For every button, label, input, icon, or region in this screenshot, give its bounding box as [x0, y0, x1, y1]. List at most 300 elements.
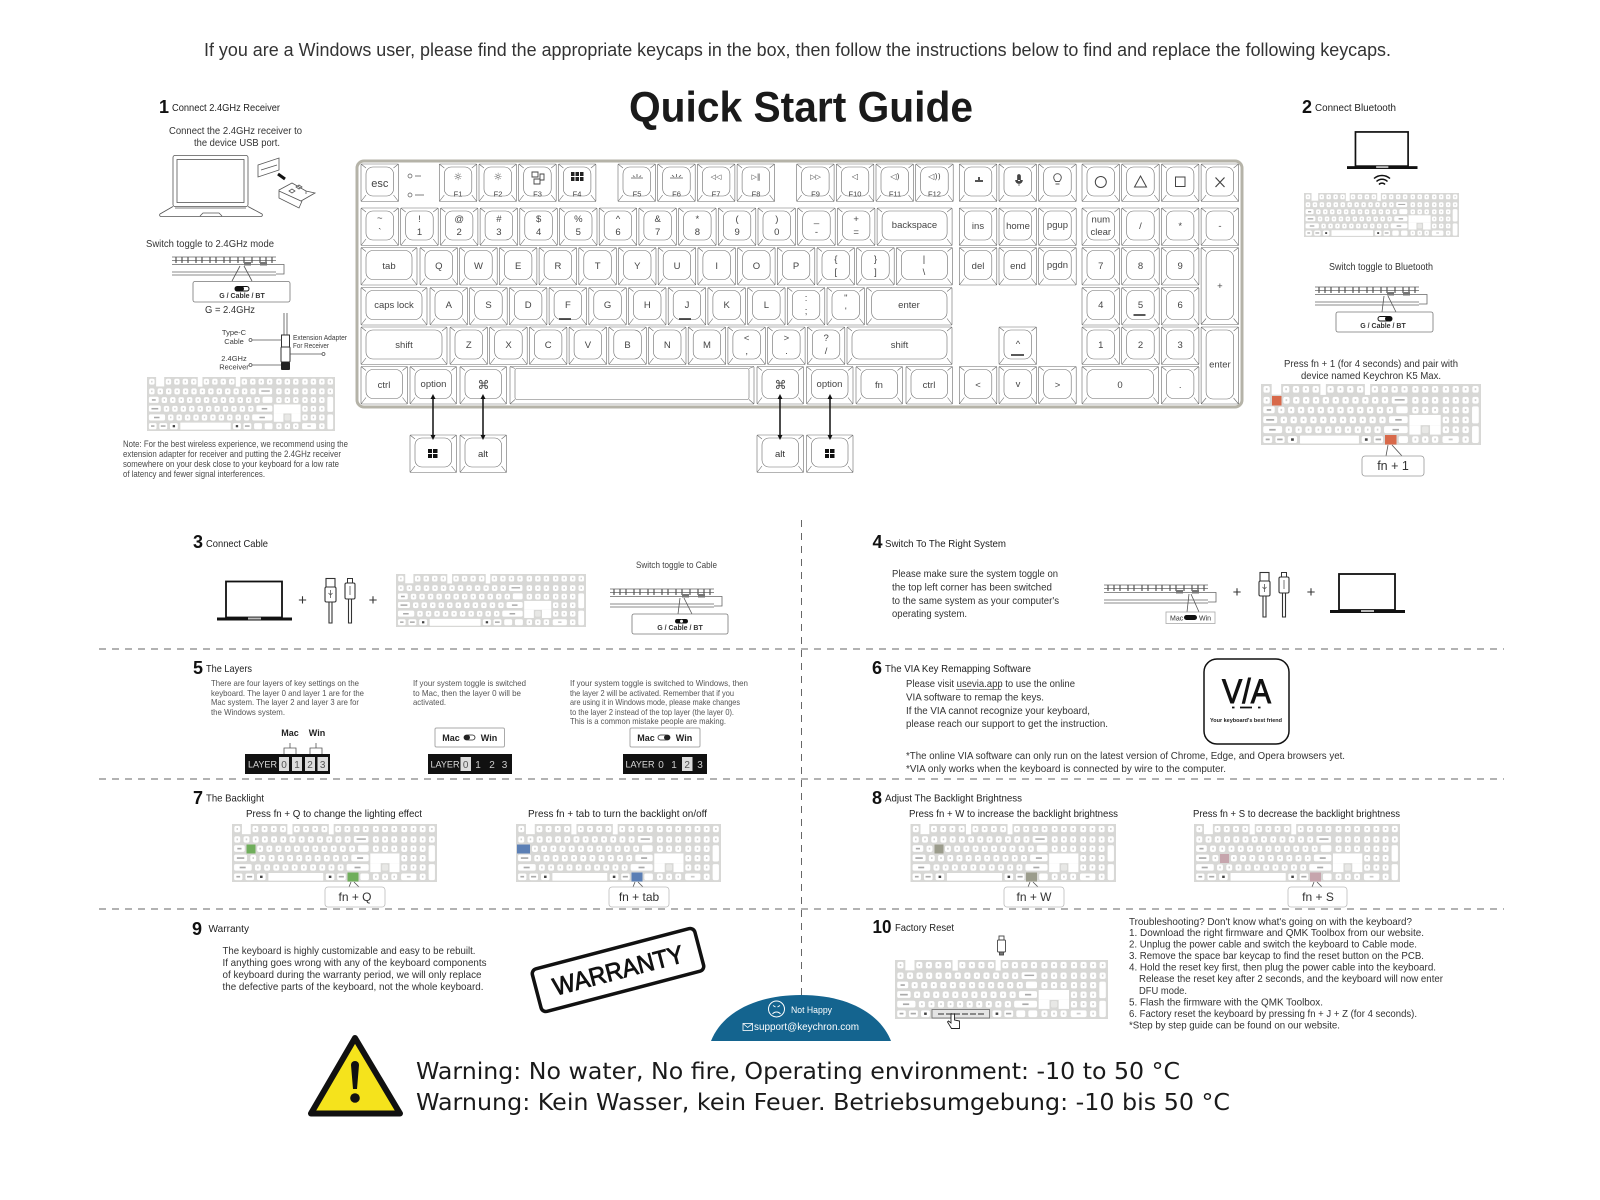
- panel: Windows replacement keycaps: alt: [775, 449, 785, 460]
- warning text: Warnung: Kein Wasser, kein Feuer. Betriebsumgebung: -10 bis 50 °C: [416, 1090, 1230, 1116]
- mini keyboard: [147, 376, 335, 431]
- instruction fn S: Press fn + S to decrease the backlight brightness: [1193, 808, 1400, 820]
- key combo: fn + 1: fn + 1: [1377, 459, 1409, 473]
- layer indicator: all layers: Mac: [281, 728, 299, 738]
- keyboard side view with toggle: [1315, 287, 1433, 332]
- layers text column 1: Mac system. The layer 2 and layer 3 are for: [211, 697, 359, 707]
- keyboard side view with system toggle: Win: [1199, 616, 1211, 622]
- layer indicator: windows: [623, 728, 707, 774]
- step 1 instruction: Connect the 2.4GHz receiver to: [169, 125, 302, 137]
- layer indicator: all layers: 0: [281, 760, 287, 771]
- instruction fn tab: Press fn + tab to turn the backlight on/off: [528, 808, 707, 820]
- layer indicator: windows: LAYER: [626, 760, 655, 770]
- icon: VIA logo: V/A: [1222, 673, 1271, 711]
- key labels: F4: [573, 190, 581, 198]
- mini keyboard fn Q: [232, 823, 437, 887]
- key labels: 6: [615, 227, 621, 238]
- layer indicator: all layers: 3: [320, 760, 326, 771]
- step 6 heading: 6: [872, 658, 882, 678]
- key labels: clear: [1091, 227, 1111, 238]
- warning text: Warning: No water, No fire, Operating environment: -10 to 50 °C: [416, 1059, 1180, 1085]
- layers text column 1: the Windows system.: [211, 707, 285, 717]
- key labels: G: [604, 300, 611, 311]
- step 3 heading: Connect Cable: [206, 538, 268, 550]
- troubleshooting text: Release the reset key after 2 seconds, and the keyboard will now enter: [1139, 973, 1443, 985]
- step 4 text: the top left corner has been switched: [892, 582, 1052, 594]
- icon: usb cables: [1259, 572, 1289, 617]
- diagram: extension adapter: Cable: [224, 337, 244, 346]
- key labels: 2: [1138, 340, 1143, 351]
- G equals label: G = 2.4GHz: [205, 304, 255, 316]
- key labels: >: [784, 333, 790, 344]
- key labels: enter: [898, 300, 920, 311]
- key labels: ◁): [889, 172, 900, 181]
- VIA footnotes: *The online VIA software can only run on the latest version of Chrome, Edge, and Opera browsers yet.: [906, 750, 1345, 762]
- warning text: [416, 1059, 1230, 1116]
- key labels: !: [418, 214, 421, 225]
- mini keyboard: [396, 573, 586, 627]
- step 4 heading: [872, 532, 1006, 552]
- callout: support contact: support@keychron.com: [754, 1021, 859, 1033]
- step 6 text: Please visit usevia.app to use the online: [906, 678, 1075, 690]
- icon: sad face: [768, 1001, 784, 1017]
- layers text column 3: are using it in Windows mode, please make changes: [570, 697, 740, 707]
- icon: warning triangle: [311, 1038, 400, 1114]
- panel: Windows replacement keycaps: alt: [478, 449, 488, 460]
- panel: step 5 the layers: [193, 658, 748, 774]
- step 10 heading: Factory Reset: [895, 922, 954, 934]
- key labels: &: [655, 214, 662, 225]
- key labels: ~: [377, 213, 383, 224]
- warranty stamp: [531, 927, 705, 1013]
- step 5 heading: [193, 658, 252, 678]
- key labels: -: [815, 227, 818, 238]
- step 1 instruction: [169, 125, 302, 149]
- key labels: #: [496, 214, 502, 225]
- key labels: 3: [496, 227, 502, 238]
- panel: step 7 the backlight: [193, 788, 721, 907]
- key labels: home: [1006, 221, 1030, 232]
- warranty text: of keyboard during the warranty period, we will only replace: [222, 969, 482, 981]
- note text: extension adapter for receiver and putting the 2.4GHz receiver: [123, 449, 341, 460]
- key labels: V: [585, 340, 592, 351]
- key labels: ☼: [494, 172, 503, 183]
- layers text column 1: keyboard. The layer 0 and layer 1 are for the: [211, 688, 364, 698]
- step 10 heading: [872, 917, 954, 937]
- troubleshooting text: 3. Remove the space bar keycap to find the reset button on the PCB.: [1129, 950, 1424, 962]
- key labels: 7: [1098, 261, 1103, 272]
- key labels: .: [1179, 380, 1182, 391]
- key labels: Z: [466, 340, 472, 351]
- key labels: fn: [875, 380, 883, 391]
- key labels: [: [834, 267, 837, 278]
- mini keyboard fn S: [1194, 823, 1400, 887]
- layer indicator: windows: 3: [697, 760, 703, 771]
- note text: Note: For the best wireless experience, we recommend using the: [123, 439, 348, 450]
- key labels: ': [845, 306, 847, 317]
- troubleshooting text: Troubleshooting? Don't know what's going on with the keyboard?: [1129, 916, 1412, 928]
- instruction fn W: Press fn + W to increase the backlight brightness: [909, 808, 1118, 820]
- key labels: Q: [435, 261, 442, 272]
- step 2 heading: 2: [1302, 97, 1312, 117]
- key labels: P: [793, 261, 799, 272]
- diagram: extension adapter: [219, 313, 347, 372]
- step 3 heading: [193, 532, 268, 552]
- troubleshooting text: 1. Download the right firmware and QMK Toolbox from our website.: [1129, 927, 1424, 939]
- step 1 heading: Connect 2.4GHz Receiver: [172, 102, 280, 114]
- key combo fn S: [1288, 887, 1347, 907]
- key labels: F2: [494, 190, 502, 198]
- step 2 heading: [1302, 97, 1396, 117]
- key labels: shift: [891, 340, 909, 351]
- key labels: M: [703, 340, 711, 351]
- key combo fn W: [1004, 887, 1064, 907]
- key labels: F5: [633, 190, 641, 198]
- layer indicator: all layers: 1: [294, 760, 300, 771]
- plus: +: [1307, 584, 1316, 601]
- note text: of latency and fewer signal interferences.: [123, 469, 265, 480]
- layer indicator: all layers: LAYER: [248, 760, 277, 770]
- layers text column 3: If your system toggle is switched to Windows, then: [570, 678, 748, 688]
- icon: laptop: [1330, 574, 1405, 613]
- layers text column 1: [211, 678, 364, 717]
- icon: usb c plug: [998, 936, 1006, 955]
- key labels: >: [1055, 380, 1061, 391]
- panel: step 8 backlight brightness: [872, 788, 1400, 907]
- step 9 heading: Warranty: [208, 923, 250, 935]
- keyboard side view with toggle: G / Cable / BT: [657, 625, 703, 632]
- key labels: (: [736, 214, 740, 225]
- key combo fn tab: fn + tab: [619, 890, 660, 904]
- icon: VIA logo: [1204, 659, 1289, 744]
- key labels: 5: [1138, 300, 1143, 311]
- key labels: 0: [1117, 380, 1123, 391]
- step 10 heading: 10: [872, 917, 892, 937]
- keyboard side view with toggle: [610, 589, 728, 634]
- step 4 text: [892, 568, 1059, 620]
- key labels: U: [674, 261, 681, 272]
- key labels: R: [554, 261, 561, 272]
- step 4 heading: 4: [872, 532, 883, 552]
- key labels: ": [844, 293, 847, 304]
- key combo fn Q: fn + Q: [338, 890, 372, 904]
- note text: somewhere on your desk close to your keyboard for a low rate: [123, 459, 339, 470]
- pairing instruction: Press fn + 1 (for 4 seconds) and pair with: [1284, 358, 1458, 370]
- key labels: *: [1178, 221, 1182, 232]
- layers text column 2: to Mac, then the layer 0 will be: [413, 688, 521, 698]
- key labels: X: [505, 340, 512, 351]
- key labels: backspace: [892, 220, 937, 231]
- key labels: [371, 172, 1231, 392]
- key labels: ◁◁: [711, 173, 722, 181]
- key labels: ▷▷: [810, 173, 821, 181]
- key labels: <: [975, 380, 981, 391]
- key labels: 5: [576, 227, 581, 238]
- mini keyboard with reset highlight: [895, 959, 1108, 1019]
- diagram: extension adapter: For Receiver: [293, 341, 329, 350]
- icon: laptop outline: [160, 156, 262, 216]
- icon: usb receiver: [258, 158, 315, 208]
- layer indicator: mac: 2: [489, 760, 495, 771]
- key labels: tab: [382, 261, 396, 272]
- key labels: |: [923, 254, 925, 265]
- warranty text: If anything goes wrong with any of the keyboard components: [222, 957, 486, 969]
- key labels: 9: [1178, 261, 1183, 272]
- note text: [123, 439, 348, 480]
- key labels: F3: [533, 190, 542, 198]
- dividers: [99, 649, 1504, 909]
- key labels: O: [753, 261, 760, 272]
- step 7 heading: [193, 788, 264, 808]
- step 4 text: to the same system as your computer's: [892, 595, 1059, 607]
- key labels: F8: [752, 190, 760, 198]
- step 6 heading: [872, 658, 1031, 678]
- plus: +: [298, 592, 307, 609]
- key labels: W: [474, 261, 483, 272]
- arrows: keycap mapping: [430, 394, 832, 440]
- troubleshooting text: 2. Unplug the power cable and switch the keyboard to Cable mode.: [1129, 938, 1417, 950]
- key labels: 2: [457, 227, 462, 238]
- key labels: :: [805, 293, 807, 304]
- key labels: K: [724, 300, 731, 311]
- key labels: end: [1010, 261, 1026, 272]
- key combo fn Q: [325, 887, 385, 907]
- key labels: @: [454, 214, 464, 225]
- key labels: ins: [972, 221, 984, 232]
- icon: hand cursor: [948, 1014, 960, 1028]
- step 8 heading: Adjust The Backlight Brightness: [885, 792, 1022, 804]
- key labels: D: [525, 300, 532, 311]
- step 4 text: operating system.: [892, 608, 967, 620]
- layer indicator: windows: Win: [676, 733, 692, 743]
- keyboard side view with system toggle: [1104, 585, 1216, 624]
- key labels: .: [785, 346, 788, 357]
- key labels: F9: [811, 190, 820, 198]
- key labels: `: [378, 227, 381, 238]
- key labels: ]: [874, 267, 877, 278]
- layer indicator: mac: Win: [481, 733, 497, 743]
- key labels: A: [446, 300, 453, 311]
- layer indicator: mac: [428, 728, 512, 774]
- step 6 text: please reach our support to get the instruction.: [906, 718, 1108, 730]
- key labels: ?: [823, 333, 829, 344]
- mini keyboard: [1304, 192, 1459, 237]
- key labels: 0: [774, 227, 779, 238]
- layers text column 2: [413, 678, 526, 707]
- pairing instruction: device named Keychron K5 Max.: [1301, 370, 1441, 382]
- key labels: ⌘: [774, 378, 786, 392]
- key labels: %: [574, 214, 583, 225]
- warranty stamp: WARRANTY: [550, 940, 687, 1002]
- step 6 text: [906, 678, 1108, 730]
- key labels: =: [853, 227, 859, 238]
- layer indicator: mac: 3: [502, 760, 508, 771]
- key labels: }: [874, 254, 877, 265]
- key labels: F7: [712, 190, 720, 198]
- icon: VIA logo: Your keyboard's best friend: [1210, 718, 1282, 724]
- troubleshooting text: 5. Flash the firmware with the QMK Toolbox.: [1129, 996, 1323, 1008]
- key labels: pgdn: [1047, 260, 1068, 271]
- key labels: ◁: [851, 172, 858, 181]
- step 7 heading: The Backlight: [206, 792, 264, 804]
- key labels: H: [644, 300, 651, 311]
- key labels: ctrl: [923, 380, 935, 391]
- key labels: ☼: [454, 172, 463, 183]
- instruction fn Q: Press fn + Q to change the lighting effect: [246, 808, 422, 820]
- key labels: ⌘: [478, 378, 490, 392]
- title: Quick Start Guide: [629, 84, 973, 132]
- VIA footnotes: [906, 750, 1345, 775]
- mini keyboard with highlighted keys: [1261, 383, 1481, 456]
- step 8 heading: 8: [872, 788, 882, 808]
- key labels: F1: [454, 190, 462, 198]
- key labels: caps lock: [374, 300, 414, 311]
- callout: support contact: Not Happy: [791, 1005, 832, 1016]
- key labels: S: [485, 300, 492, 311]
- layers text column 1: There are four layers of key settings on the: [211, 678, 359, 688]
- troubleshooting text: DFU mode.: [1139, 985, 1187, 997]
- toggle label: Switch toggle to Bluetooth: [1329, 261, 1433, 273]
- key labels: B: [624, 340, 631, 351]
- mini keyboard fn tab: [516, 823, 721, 887]
- key labels: *: [696, 214, 700, 225]
- key labels: 8: [1138, 261, 1143, 272]
- panel: step 1 connect 2.4GHz receiver: [123, 97, 348, 480]
- pairing instruction: [1284, 358, 1458, 382]
- key labels: option: [817, 379, 842, 390]
- switch toggle label: Switch toggle to 2.4GHz mode: [146, 238, 274, 250]
- key labels: Y: [634, 261, 641, 272]
- key labels: ◁)): [927, 172, 941, 181]
- layer indicator: mac: LAYER: [430, 760, 460, 770]
- step 4 text: Please make sure the system toggle on: [892, 568, 1058, 580]
- key labels: -: [1218, 221, 1221, 232]
- step 5 heading: 5: [193, 658, 203, 678]
- key labels: ,: [745, 346, 748, 357]
- key labels: ;: [805, 306, 807, 317]
- key labels: I: [715, 261, 718, 272]
- key labels: $: [536, 214, 542, 225]
- key labels: F: [565, 300, 571, 311]
- key labels: /: [1139, 221, 1142, 232]
- step 3 heading: 3: [193, 532, 203, 552]
- panel: Windows replacement keycaps: [410, 435, 853, 472]
- spacebar: [510, 366, 754, 404]
- step 8 heading: [872, 788, 1022, 808]
- keyboard side view with toggle: G / Cable / BT: [219, 293, 265, 300]
- key labels: del: [972, 261, 984, 272]
- panel: step 10 factory reset: [872, 916, 1443, 1032]
- key labels: 1: [417, 227, 422, 238]
- panel: step 9 warranty: [192, 919, 705, 1013]
- key labels: num: [1092, 214, 1110, 226]
- key labels: +: [853, 214, 859, 225]
- step 5 heading: The Layers: [206, 663, 252, 675]
- diagram: extension adapter: 2.4GHz: [221, 354, 247, 363]
- step 4 heading: Switch To The Right System: [885, 538, 1006, 550]
- key labels: +: [1217, 281, 1223, 292]
- key labels: enter: [1209, 360, 1231, 370]
- key labels: E: [515, 261, 521, 272]
- layer indicator: all layers: 2: [307, 760, 313, 771]
- key labels: ^: [1016, 339, 1021, 350]
- panel: step 6 VIA software: [872, 658, 1345, 775]
- key labels: 6: [1178, 300, 1183, 311]
- layers text column 2: If your system toggle is switched: [413, 678, 526, 688]
- keyboard side view with toggle: [172, 257, 290, 302]
- layer indicator: mac: Mac: [442, 733, 460, 743]
- key labels: /: [825, 346, 828, 357]
- layers text column 3: to the layer 2 instead of the top layer (the layer 0).: [570, 707, 734, 717]
- heading: Windows user note: If you are a Windows user, please find the appropriate keycaps in the box, then follow the instructions below to find and replace the following keycaps.: [204, 40, 1391, 60]
- step 7 heading: 7: [193, 788, 203, 808]
- panel: step 4 switch to the right system: [872, 532, 1405, 624]
- step 9 heading: 9: [192, 919, 202, 939]
- diagram: extension adapter: Extension Adapter: [293, 333, 347, 342]
- step 1 heading: 1: [159, 97, 169, 117]
- icon: wifi: [1374, 175, 1390, 184]
- step 9 heading: [192, 919, 250, 939]
- layer indicator: windows: 2: [684, 760, 690, 771]
- key labels: option: [421, 379, 446, 390]
- warranty text: The keyboard is highly customizable and easy to be rebuilt.: [222, 945, 476, 957]
- key labels: F11: [889, 190, 901, 198]
- key labels: shift: [395, 340, 413, 351]
- icon: envelope: [743, 1024, 752, 1030]
- warranty text: [222, 945, 486, 993]
- layer indicator: windows: 1: [671, 760, 677, 771]
- warranty text: the defective parts of the keyboard, not the whole keyboard.: [222, 981, 484, 993]
- key labels: 4: [536, 227, 541, 238]
- panel: step 3 connect cable: [193, 532, 728, 634]
- step 6 text: If the VIA cannot recognize your keyboard,: [906, 705, 1090, 717]
- troubleshooting text: 6. Factory reset the keyboard by pressing fn + J + Z (for 4 seconds).: [1129, 1008, 1417, 1020]
- key labels: F10: [849, 190, 861, 198]
- key labels: F12: [928, 190, 941, 198]
- layer indicator: windows: Mac: [637, 733, 655, 743]
- key labels: 9: [734, 227, 740, 238]
- key labels: _: [813, 214, 820, 225]
- key combo fn S: fn + S: [1302, 890, 1334, 904]
- key labels: <: [744, 333, 750, 344]
- panel: main keyboard diagram: [357, 160, 1242, 407]
- mini keyboard fn W: [910, 823, 1116, 887]
- keyboard side view with toggle: G / Cable / BT: [1360, 323, 1406, 330]
- layers text column 2: activated.: [413, 697, 446, 707]
- key combo: fn + 1: [1362, 456, 1424, 476]
- layer indicator: mac: 1: [475, 760, 481, 771]
- key labels: 1: [1098, 340, 1103, 351]
- key combo fn W: fn + W: [1016, 890, 1052, 904]
- layer indicator: windows: 0: [658, 760, 664, 771]
- key labels: 4: [1098, 300, 1103, 311]
- troubleshooting text: *Step by step guide can be found on our website.: [1129, 1020, 1340, 1032]
- panel: step 2 connect bluetooth: [1261, 97, 1481, 476]
- key labels: ^: [616, 214, 621, 225]
- icon: laptop: [1347, 132, 1418, 169]
- layers text column 3: This is a common mistake people are making.: [570, 716, 726, 726]
- key labels: C: [545, 340, 552, 351]
- key labels: N: [664, 340, 671, 351]
- VIA footnotes: *VIA only works when the keyboard is connected by wire to the computer.: [906, 763, 1226, 775]
- key labels: F6: [672, 190, 681, 198]
- function row icons: [532, 172, 1224, 355]
- key labels: T: [595, 261, 601, 272]
- layers text column 3: [570, 678, 748, 726]
- key combo fn tab: [609, 887, 669, 907]
- layer indicator: mac: 0: [463, 760, 469, 771]
- callout: support contact: [711, 995, 891, 1041]
